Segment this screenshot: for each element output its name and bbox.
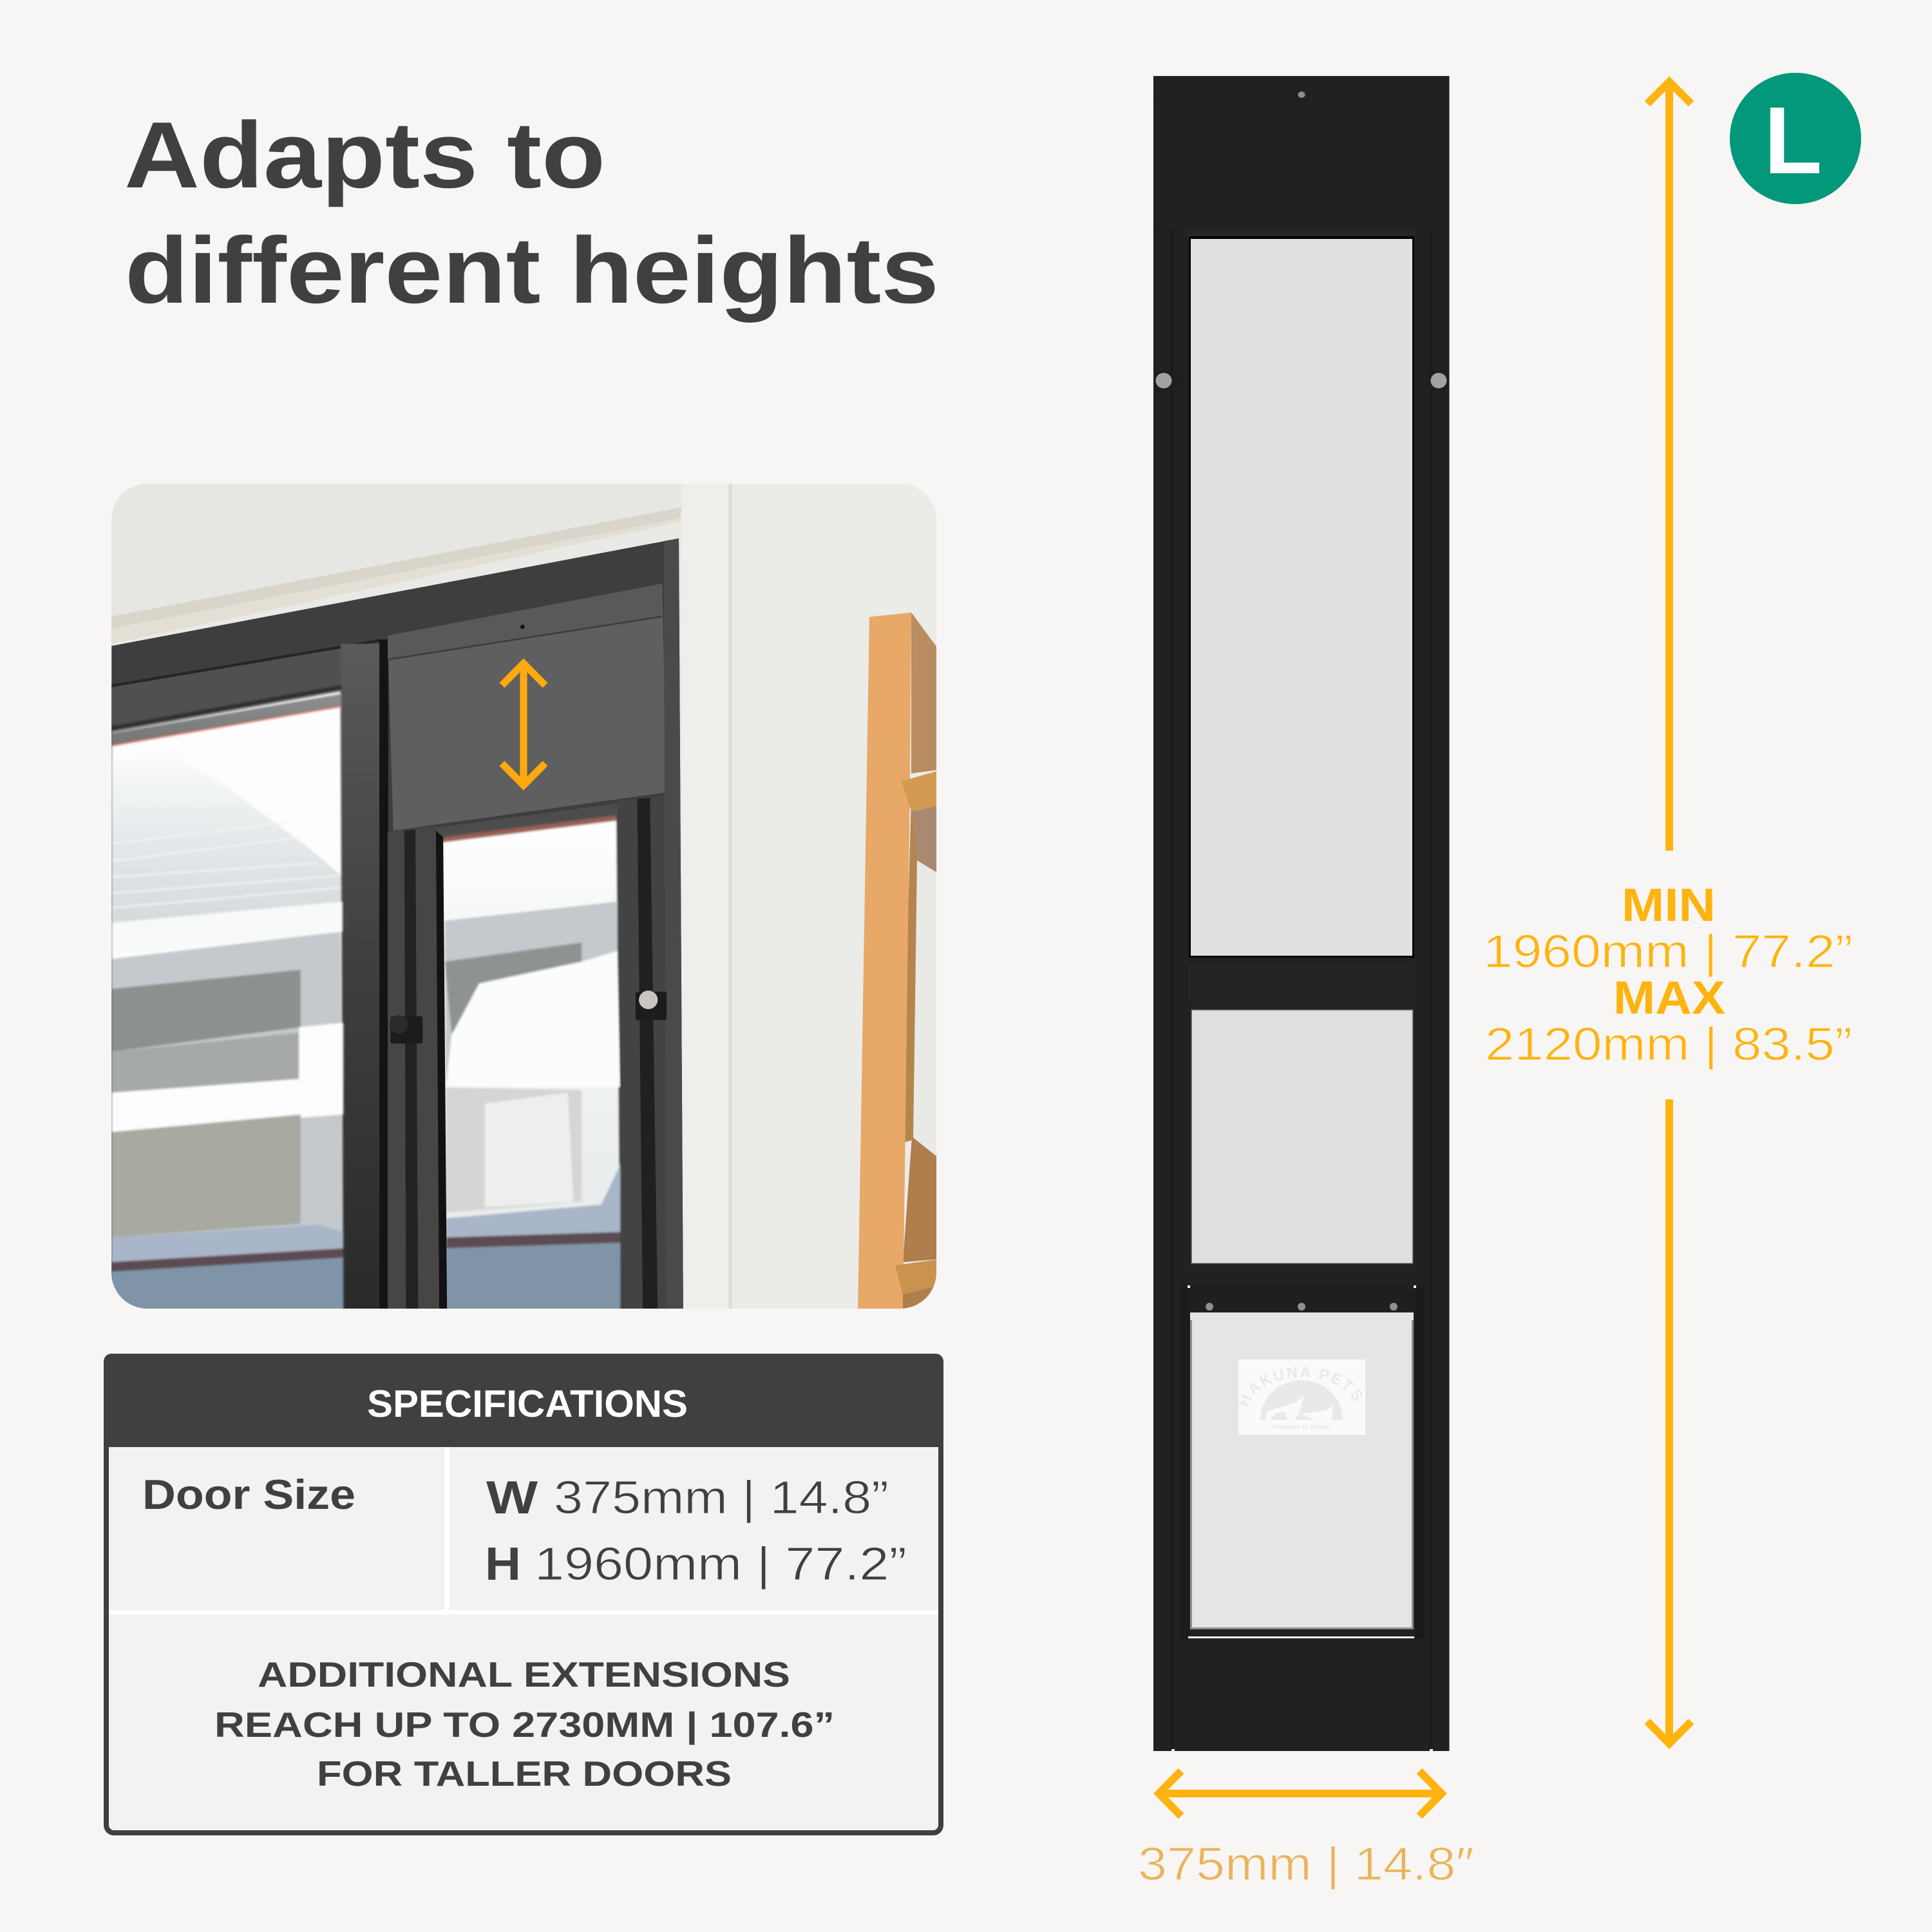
left window reflection xyxy=(111,687,343,1314)
pet flap xyxy=(1190,1312,1414,1629)
size badge L xyxy=(1730,73,1861,204)
right glass reflection xyxy=(442,815,621,1314)
table heading: SPECIFICATIONS xyxy=(367,1383,688,1425)
height labels: 2120mm | 83.5” xyxy=(1485,1019,1852,1070)
flap frame xyxy=(1179,1285,1425,1639)
arrow: width xyxy=(1159,1771,1441,1816)
wood shelf xyxy=(858,612,940,1314)
side rails xyxy=(388,828,435,1309)
additional extensions note: ADDITIONAL EXTENSIONS xyxy=(258,1654,790,1694)
width label: 375mm | 14.8″ xyxy=(1138,1839,1474,1890)
width value: 375mm | 14.8” xyxy=(554,1472,889,1524)
title: Adapts to xyxy=(124,102,605,207)
arrow: height bottom xyxy=(1647,1099,1691,1744)
arrow: adjust direction on photo xyxy=(502,663,545,785)
siding and window lip in page coordinates xyxy=(111,687,343,955)
height labels: MIN xyxy=(1622,880,1716,931)
side knobs xyxy=(1155,371,1448,390)
height value: 1960mm | 77.2” xyxy=(535,1539,907,1590)
flap bottom strip xyxy=(1188,1636,1414,1638)
knobs xyxy=(390,1016,422,1043)
product: pet door panel xyxy=(1153,76,1450,1751)
arrow: height top xyxy=(1647,82,1691,851)
width value: W xyxy=(486,1472,538,1524)
logo: Freedom to Roam xyxy=(1272,1423,1329,1431)
middle glass xyxy=(1191,1010,1413,1264)
title xyxy=(124,102,939,323)
door size label: Door Size xyxy=(142,1471,355,1518)
additional extensions note: FOR TALLER DOORS xyxy=(317,1754,732,1794)
upper glass xyxy=(1189,236,1414,958)
height value: H xyxy=(485,1539,521,1590)
middle rail xyxy=(1187,962,1416,1003)
logo xyxy=(1238,1359,1365,1435)
height labels xyxy=(1483,880,1853,1070)
top screw xyxy=(1298,91,1305,98)
flap screws xyxy=(1206,1303,1397,1311)
additional extensions note xyxy=(214,1654,835,1794)
additional extensions note: REACH UP TO 2730MM | 107.6” xyxy=(214,1705,835,1745)
adjustable top panel xyxy=(388,583,667,831)
height labels: 1960mm | 77.2” xyxy=(1483,926,1853,978)
size badge L: L xyxy=(1764,88,1822,194)
photo: door panel installed in sliding door xyxy=(111,484,936,1309)
height labels: MAX xyxy=(1613,972,1725,1024)
logo: HAKUNA PETS xyxy=(1239,1367,1363,1406)
specifications table xyxy=(104,1354,943,1833)
title: different heights xyxy=(125,218,939,323)
